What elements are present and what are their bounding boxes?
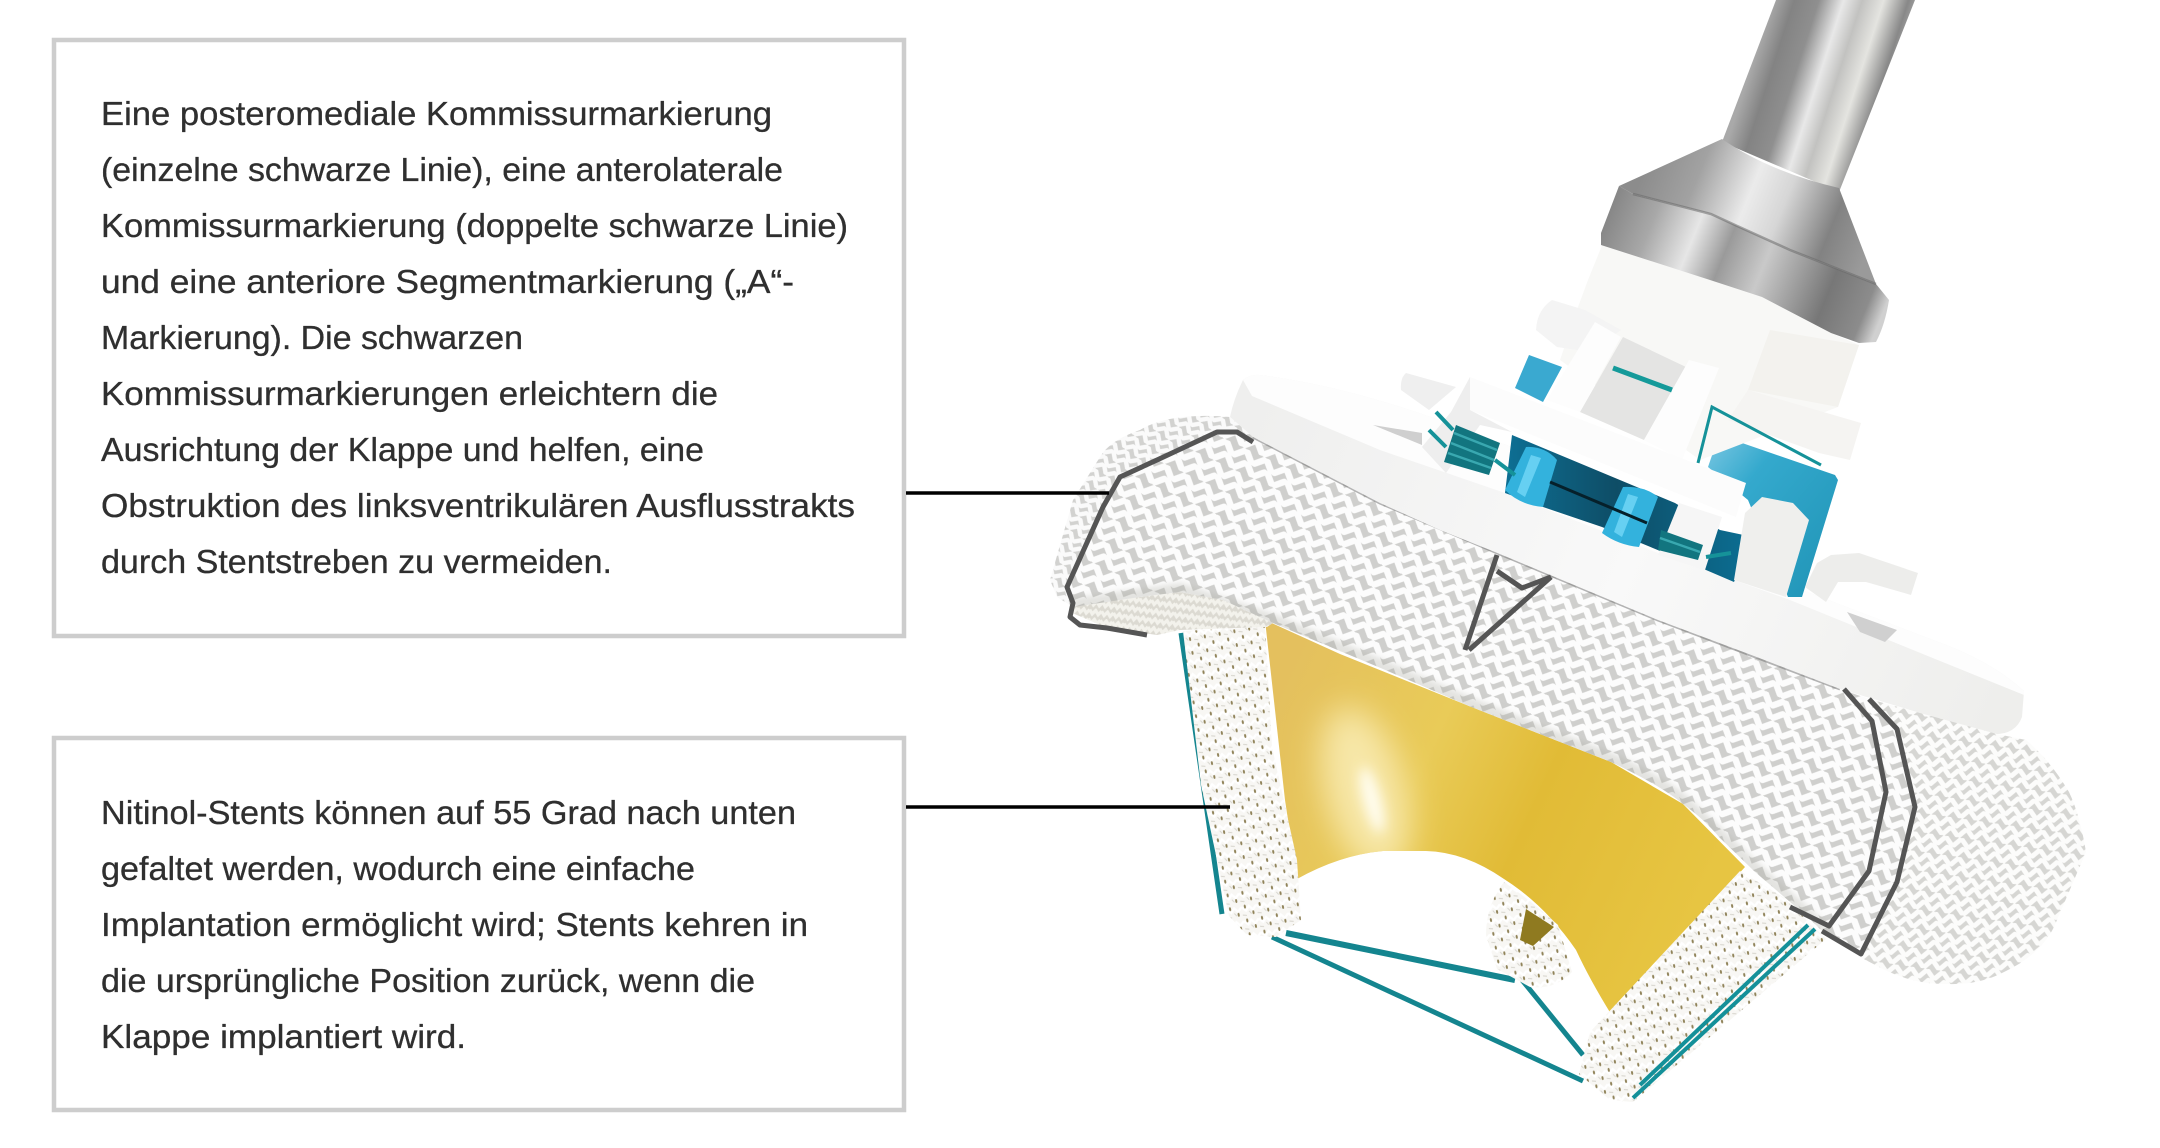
text block: commissure markings description: Kommissurmarkierung (doppelte schwarze Linie)	[101, 207, 848, 244]
text block: nitinol stents description: Klappe implantiert wird.	[101, 1018, 466, 1055]
teal wire frame	[1698, 407, 1821, 465]
text block: commissure markings description: (einzelne schwarze Linie), eine anterolaterale	[101, 151, 783, 188]
left stent post	[1183, 627, 1301, 937]
white sewing disc	[1230, 375, 2024, 734]
callout line: nitinol stent	[906, 805, 1230, 809]
teal crimp coil left	[1429, 412, 1515, 475]
right flange	[1728, 390, 1861, 460]
cuff edge shading	[1073, 437, 1840, 931]
metal shaft and cone	[1601, 0, 1915, 343]
blue pillar 1	[1505, 447, 1557, 507]
text block: nitinol stents description	[101, 794, 808, 1055]
cuff back lobe	[1050, 416, 1253, 607]
blue block right	[1708, 435, 1838, 597]
left strip	[1547, 322, 1621, 412]
cuff main front	[1067, 432, 1915, 954]
text block: commissure markings description: Kommissurmarkierungen erleichtern die	[101, 375, 718, 412]
front flange	[1470, 377, 1746, 517]
callout line: commissure marking	[906, 491, 1109, 495]
translucent flange leg	[1422, 377, 1512, 473]
white holder collar	[1401, 243, 1918, 602]
text block: commissure markings description: und eine anteriore Segmentmarkierung („A“-	[101, 263, 794, 300]
panel: commissure markings	[54, 40, 904, 636]
anterior marking: A	[1465, 555, 1551, 650]
text block: nitinol stents description: Implantation ermöglicht wird; Stents kehren in	[101, 906, 808, 943]
recessed face	[1580, 337, 1686, 440]
front white post small	[1658, 503, 1722, 570]
text block: nitinol stents description: gefaltet werden, wodurch eine einfache	[101, 850, 695, 887]
white hook	[1805, 553, 1918, 602]
left tab	[1401, 373, 1456, 410]
text block: nitinol stents description: Nitinol-Stents können auf 55 Grad nach unten	[101, 794, 796, 831]
teal stent wires behind	[1181, 633, 1583, 1081]
text block: nitinol stents description: die ursprüngliche Position zurück, wenn die	[101, 962, 755, 999]
right stent post	[1579, 871, 1826, 1102]
big white post	[1734, 497, 1809, 597]
text block: commissure markings description: durch Stentstreben zu vermeiden.	[101, 543, 612, 580]
dark teal base	[1505, 435, 1753, 582]
text block: commissure markings description: Markierung). Die schwarzen	[101, 319, 523, 356]
illustration: heart valve on holder	[1050, 0, 2086, 1102]
blue pillar 2	[1602, 487, 1658, 547]
middle stent post	[1486, 882, 1572, 987]
yellow leaflet	[1265, 620, 1745, 1014]
text block: commissure markings description: Eine posteromediale Kommissurmarkierung	[101, 95, 772, 132]
text block: commissure markings description: Obstruktion des linksventrikulären Ausflusstrakts	[101, 487, 855, 524]
cuff right lobe	[1858, 699, 2086, 984]
teal crimp coil right	[1658, 530, 1731, 560]
woven cuff	[1050, 416, 2086, 984]
text block: commissure markings description	[101, 95, 855, 580]
commissure mark: double black line	[1790, 689, 1915, 954]
right strip	[1644, 360, 1719, 460]
cuff underside	[1070, 592, 1273, 635]
text block: commissure markings description: Ausrichtung der Klappe und helfen, eine	[101, 431, 704, 468]
commissure mark: single black line	[1067, 432, 1253, 635]
upper tab	[1536, 300, 1621, 352]
blue block upper left	[1515, 355, 1562, 402]
blue holder mechanism	[1505, 355, 1838, 597]
panel: nitinol stents	[54, 738, 904, 1110]
